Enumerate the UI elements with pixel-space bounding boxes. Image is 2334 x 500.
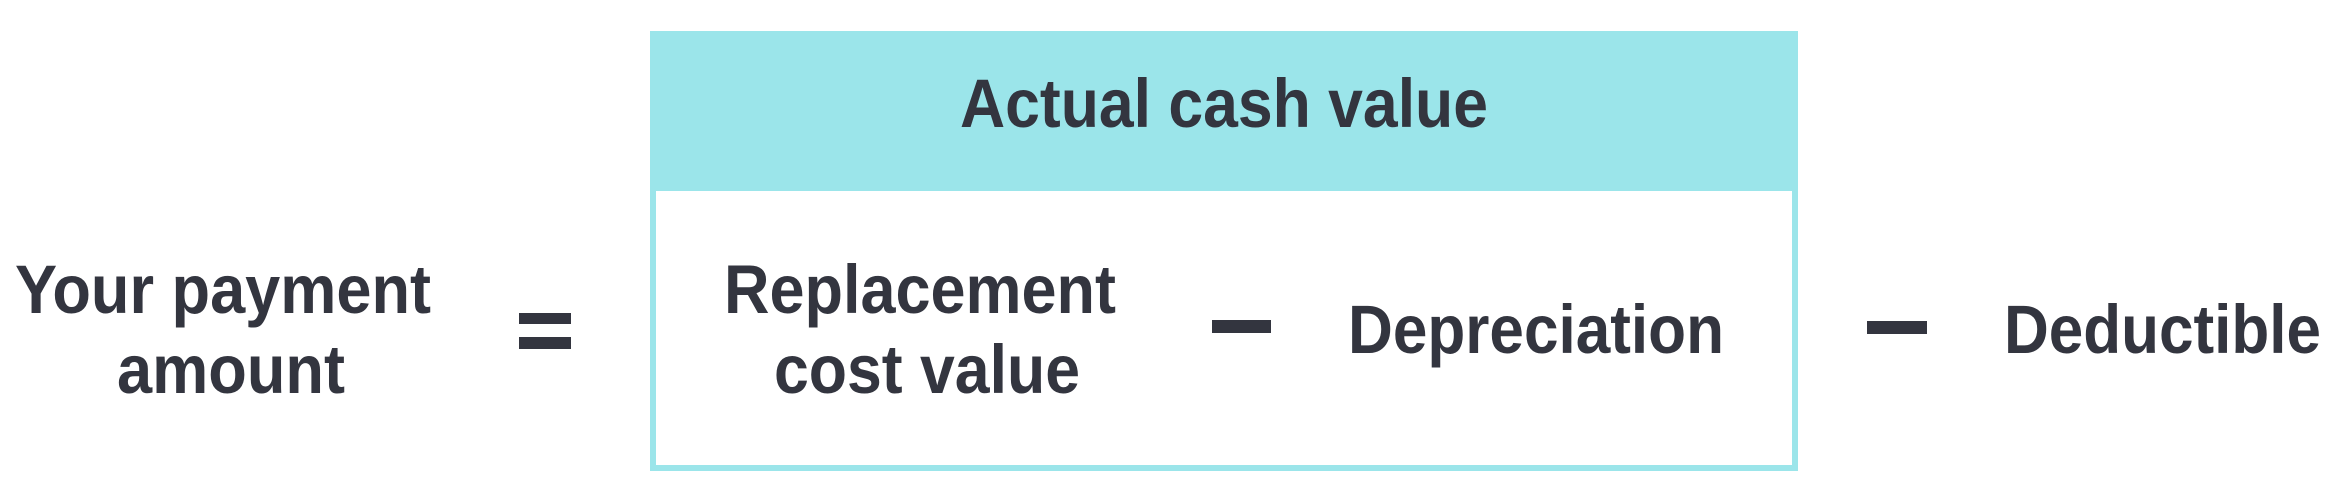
left text: your payment amount: amount	[117, 331, 345, 408]
heading: Actual cash value	[960, 65, 1488, 142]
left text: your payment amount: Your payment	[15, 251, 431, 328]
text: replacement cost value: cost value	[774, 331, 1080, 408]
icon: equals sign	[519, 313, 571, 349]
icon: minus 2	[1867, 321, 1927, 334]
icon: minus	[1212, 320, 1271, 333]
header band	[650, 32, 1798, 191]
text: depreciation: Depreciation	[1348, 291, 1724, 368]
text: replacement cost value: Replacement	[724, 251, 1116, 328]
text: replacement cost value	[724, 251, 1116, 408]
panel: actual cash value	[650, 32, 1798, 468]
left text: your payment amount	[15, 251, 431, 408]
